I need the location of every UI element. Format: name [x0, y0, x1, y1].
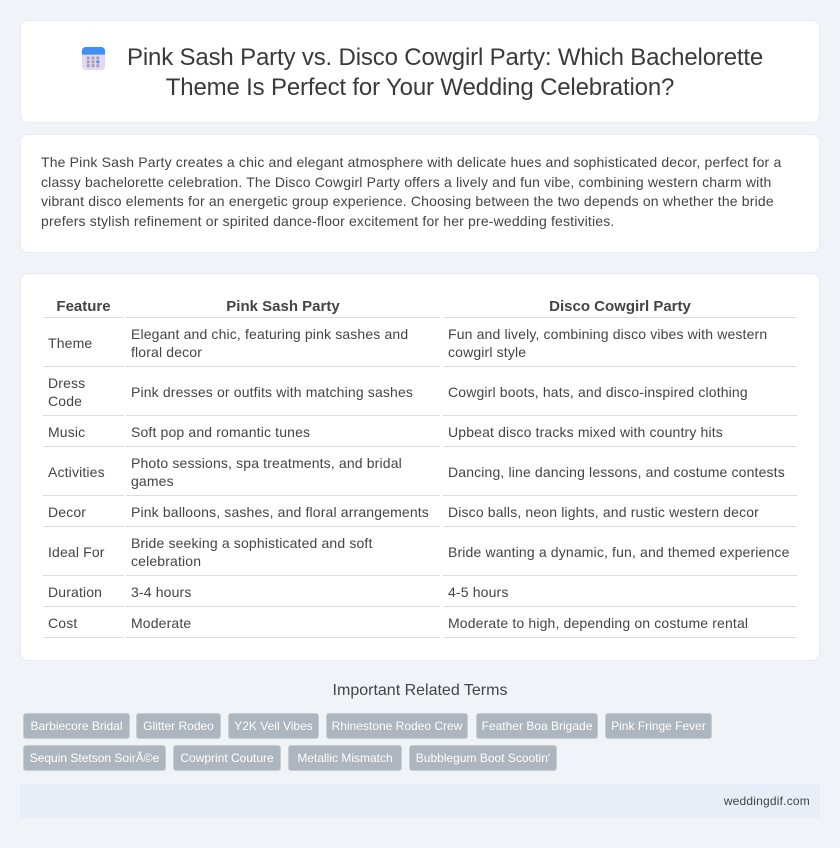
tag: Rhinestone Rodeo Crew [332, 719, 462, 733]
heading: related terms: Important Related Terms [333, 682, 507, 699]
intro paragraph: prefers stylish refinement or spirited dance-floor excitement for her pre-wedding festivities. [41, 213, 614, 229]
intro paragraph [41, 154, 782, 229]
tag [288, 745, 402, 771]
tag [136, 713, 221, 739]
tag [23, 713, 130, 739]
row: Decor: Disco balls, neon lights, and rustic western decor [448, 504, 759, 520]
row: Cost: Moderate [131, 615, 191, 631]
row: Decor: Decor [48, 504, 86, 520]
row: Activities: Activities [48, 464, 105, 480]
related term tags [23, 713, 712, 771]
panel: title card [20, 20, 820, 123]
row: Activities [48, 455, 785, 489]
tag [605, 713, 712, 739]
row: Duration [48, 584, 508, 600]
row: Activities: Dancing, line dancing lessons, and costume contests [448, 464, 785, 480]
row: Music: Music [48, 424, 85, 440]
row rules [43, 317, 797, 638]
tag [409, 745, 557, 771]
row: Decor [48, 504, 759, 520]
row: Duration: 3-4 hours [131, 584, 192, 600]
row: Dress Code: Code [48, 393, 82, 409]
tag: Barbiecore Bridal [30, 719, 123, 733]
row: Activities: games [131, 473, 174, 489]
row: Dress Code: Dress [48, 375, 85, 391]
tag: Y2K Veil Vibes [234, 719, 313, 733]
row: Theme: cowgirl style [448, 344, 526, 360]
row: Ideal For [48, 535, 790, 569]
row: Theme: Fun and lively, combining disco vibes with western [448, 326, 767, 342]
footer bar [20, 784, 820, 818]
row: Duration: Duration [48, 584, 102, 600]
tag [476, 713, 598, 739]
tag: Cowprint Couture [180, 751, 274, 765]
tag [326, 713, 468, 739]
row: Ideal For: Bride wanting a dynamic, fun, and themed experience [448, 544, 790, 560]
footer source: weddingdif.com [724, 794, 810, 808]
table header: Disco Cowgirl Party [549, 298, 691, 315]
row: Dress Code: Pink dresses or outfits with matching sashes [131, 384, 413, 400]
panel: intro text [20, 134, 820, 253]
row: Theme [48, 326, 767, 360]
row: Dress Code [48, 375, 748, 409]
row: Activities: Photo sessions, spa treatments, and bridal [131, 455, 402, 471]
tag: Bubblegum Boot Scootin' [416, 751, 550, 765]
row: Cost [48, 615, 748, 631]
title: Pink Sash Party vs. Disco Cowgirl Party: Which Bachelorette [127, 44, 763, 71]
tag: Feather Boa Brigade [482, 719, 592, 733]
row: Cost: Cost [48, 615, 77, 631]
row: Music [48, 424, 723, 440]
title: Theme Is Perfect for Your Wedding Celebration? [166, 74, 674, 101]
table header [56, 298, 691, 315]
intro paragraph: vibrant disco elements for an energetic group experience. Choosing between the two depends on whether the bride [41, 193, 774, 209]
row: Decor: Pink balloons, sashes, and floral arrangements [131, 504, 429, 520]
row: Duration: 4-5 hours [448, 584, 508, 600]
row: Ideal For: Bride seeking a sophisticated and soft [131, 535, 373, 551]
tag: Metallic Mismatch [297, 751, 393, 765]
row: Dress Code: Cowgirl boots, hats, and disco-inspired clothing [448, 384, 748, 400]
row: Ideal For: celebration [131, 553, 201, 569]
table header: Pink Sash Party [226, 298, 340, 315]
row: Music: Soft pop and romantic tunes [131, 424, 310, 440]
tag: Glitter Rodeo [143, 719, 214, 733]
intro paragraph: classy bachelorette celebration. The Disco Cowgirl Party offers a lively and fun vibe, combining western charm with [41, 174, 771, 190]
title [127, 44, 763, 101]
tag: Sequin Stetson SoirÃ©e [30, 751, 159, 765]
tag [228, 713, 319, 739]
intro paragraph: The Pink Sash Party creates a chic and elegant atmosphere with delicate hues and sophisticated decor, perfect for a [41, 154, 781, 170]
icon: calendar [82, 47, 106, 70]
table header: Feature [56, 298, 111, 315]
panel: comparison table [20, 273, 820, 661]
row: Music: Upbeat disco tracks mixed with country hits [448, 424, 723, 440]
row: Theme: Elegant and chic, featuring pink sashes and [131, 326, 408, 342]
row: Theme: Theme [48, 335, 92, 351]
row: Cost: Moderate to high, depending on costume rental [448, 615, 748, 631]
tag: Pink Fringe Fever [611, 719, 706, 733]
row: Theme: floral decor [131, 344, 202, 360]
tag [23, 745, 166, 771]
comparison table [43, 298, 797, 638]
row: Ideal For: Ideal For [48, 544, 105, 560]
tag [173, 745, 281, 771]
